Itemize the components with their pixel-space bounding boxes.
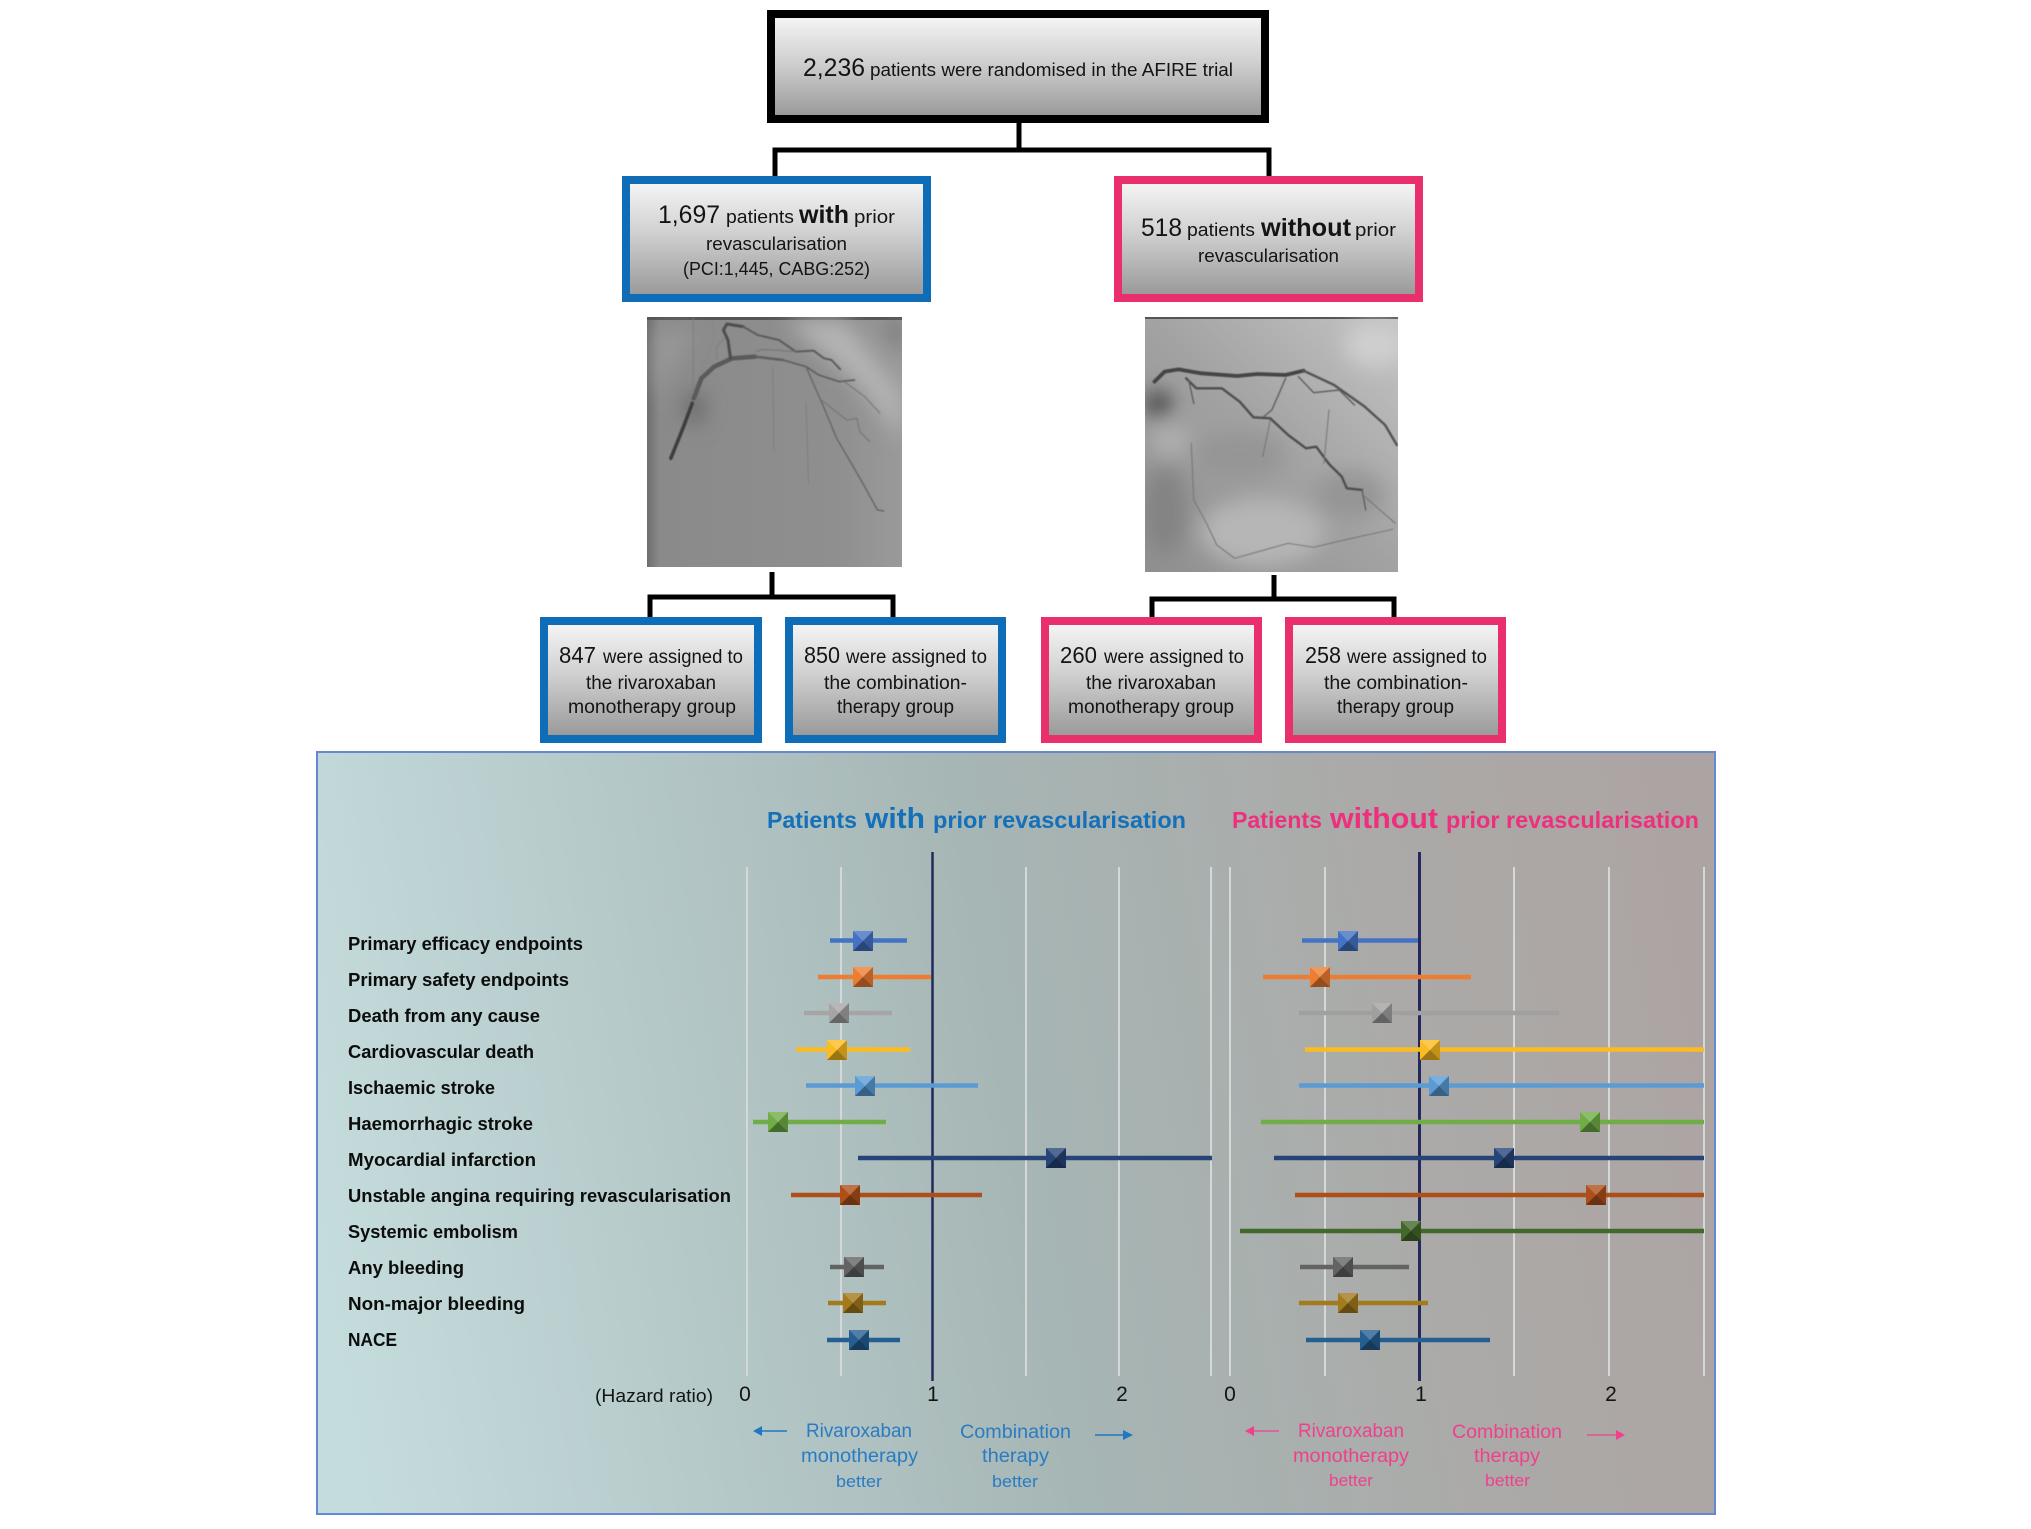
box: 850 combination therapy: the combination- [824,673,967,694]
box: 847 rivaroxaban monotherapy: monotherapy group [568,697,736,718]
flow connector: with-revascularisation arm to treatment groups [650,572,893,619]
box: 847 rivaroxaban monotherapy: were assigned to [602,647,743,668]
legend: with prior revascularisation: Rivaroxaban [806,1421,912,1442]
box: patients without prior revascularisation: 518 [1141,214,1182,242]
row: unstable angina [791,1185,982,1205]
row: non-major bleeding [1299,1293,1428,1313]
legend: without prior revascularisation: Rivaroxaban [1298,1421,1404,1442]
endpoint labels [348,934,731,1350]
row: unstable angina [1295,1185,1704,1205]
endpoint labels: Systemic embolism [348,1222,518,1242]
box: 260 rivaroxaban monotherapy: the rivaroxaban [1086,673,1216,694]
row: haemorrhagic stroke [1261,1112,1704,1132]
heading: patients with prior revascularisation: prior revascularisation [933,807,1186,833]
row: cardiovascular death [1305,1040,1704,1060]
arrow: combination better [1587,1430,1625,1440]
row: primary safety endpoints [818,967,931,987]
box: 850 combination therapy [789,621,1002,739]
box: 258 combination therapy: the combination- [1324,673,1468,694]
box: patients without prior revascularisation: without [1260,214,1352,242]
box: patients without prior revascularisation: prior [1355,220,1396,240]
row: NACE [1306,1330,1490,1350]
box: 260 rivaroxaban monotherapy: 260 [1060,642,1097,668]
row: haemorrhagic stroke [753,1112,886,1132]
image: coronary angiogram, without prior revascularisation [1143,317,1405,572]
row: myocardial infarction [858,1148,1212,1168]
legend: without prior revascularisation: Combination [1452,1422,1562,1443]
row: NACE [827,1330,900,1350]
heading: patients with prior revascularisation: with [864,803,925,835]
box: 258 combination therapy: therapy group [1337,697,1454,718]
box: randomised patients [771,14,1265,119]
row: systemic embolism [1240,1221,1704,1241]
flow connector: top box to arms [775,123,1269,180]
heading: patients without prior revascularisation: Patients [1232,807,1322,833]
endpoint labels: Cardiovascular death [348,1042,534,1062]
endpoint labels: Death from any cause [348,1006,540,1026]
row: cardiovascular death [796,1040,910,1060]
box: 258 combination therapy [1289,621,1502,739]
image: coronary angiogram, with prior revascularisation [647,317,902,567]
box: randomised patients: 2,236 [803,54,865,82]
box: 258 combination therapy: 258 [1305,642,1341,668]
box: 258 combination therapy: were assigned to [1346,647,1487,668]
legend: without prior revascularisation: better [1329,1471,1373,1490]
arrow: combination better [1095,1430,1133,1440]
row: any bleeding [830,1257,884,1277]
legend: with prior revascularisation: better [992,1472,1038,1491]
box: patients with prior revascularisation: (PCI:1,445, CABG:252) [683,259,870,279]
axis labels: hazard ratio: 1 [1415,1383,1427,1406]
endpoint labels: Primary safety endpoints [348,970,569,990]
row: death from any cause [804,1003,892,1023]
endpoint labels: NACE [348,1330,397,1350]
box: patients without prior revascularisation: revascularisation [1198,246,1339,266]
box: patients with prior revascularisation: revascularisation [706,234,847,254]
box: patients with prior revascularisation: prior [854,207,895,227]
row: myocardial infarction [1274,1148,1704,1168]
box: patients with prior revascularisation: 1,697 [658,201,720,229]
legend: without prior revascularisation [1245,1421,1625,1490]
legend: with prior revascularisation [753,1421,1133,1491]
axis labels: hazard ratio: 0 [1224,1383,1236,1406]
box: 260 rivaroxaban monotherapy [1045,621,1258,739]
box: 850 combination therapy: therapy group [837,697,954,718]
heading: patients without prior revascularisation: prior revascularisation [1446,807,1699,833]
endpoint labels: Ischaemic stroke [348,1078,495,1098]
row: non-major bleeding [828,1293,886,1313]
box: 260 rivaroxaban monotherapy: monotherapy group [1068,697,1234,718]
forest plot: with prior revascularisation [747,852,1212,1381]
arrow: rivaroxaban better [753,1426,787,1436]
legend: without prior revascularisation: monotherapy [1293,1446,1410,1467]
legend: with prior revascularisation: therapy [982,1446,1050,1467]
endpoint labels: Myocardial infarction [348,1150,536,1170]
axis labels: hazard ratio: (Hazard ratio) [595,1386,713,1406]
heading: patients with prior revascularisation: Patients [767,807,857,833]
heading: patients with prior revascularisation [767,803,1186,835]
legend: with prior revascularisation: Combination [960,1422,1071,1443]
row: primary efficacy endpoints [830,931,907,951]
forest plot: without prior revascularisation [1230,852,1704,1381]
row: death from any cause [1299,1003,1559,1023]
box: randomised patients: patients were randomised in the AFIRE trial [870,60,1233,80]
axis labels: hazard ratio [595,1383,1617,1406]
row: ischaemic stroke [1299,1076,1704,1096]
box: patients with prior revascularisation: with [798,201,849,229]
heading: patients without prior revascularisation [1232,803,1699,835]
box: 850 combination therapy: were assigned to [845,647,987,668]
endpoint labels: Unstable angina requiring revascularisation [348,1186,731,1206]
box: patients with prior revascularisation: patients [726,207,794,227]
box: 847 rivaroxaban monotherapy: 847 [559,642,596,668]
endpoint labels: Haemorrhagic stroke [348,1114,533,1134]
axis labels: hazard ratio: 0 [739,1383,751,1406]
legend: with prior revascularisation: better [836,1472,882,1491]
row: ischaemic stroke [806,1076,978,1096]
box: patients without prior revascularisation [1118,180,1419,298]
legend: without prior revascularisation: better [1485,1471,1530,1490]
flow connector: without-revascularisation arm to treatment groups [1152,575,1394,621]
box: 850 combination therapy: 850 [804,642,840,668]
box: patients with prior revascularisation [626,180,927,298]
box: 847 rivaroxaban monotherapy [544,621,758,739]
row: any bleeding [1300,1257,1409,1277]
legend: without prior revascularisation: therapy [1474,1446,1541,1467]
axis labels: hazard ratio: 2 [1116,1383,1128,1406]
axis labels: hazard ratio: 2 [1605,1383,1617,1406]
axis labels: hazard ratio: 1 [927,1383,939,1406]
panel: forest plot background [317,752,1715,1514]
legend: with prior revascularisation: monotherapy [801,1446,919,1467]
endpoint labels: Any bleeding [348,1258,464,1278]
box: patients without prior revascularisation: patients [1187,220,1255,240]
endpoint labels: Non-major bleeding [348,1294,525,1314]
arrow: rivaroxaban better [1245,1426,1279,1436]
row: primary efficacy endpoints [1302,931,1418,951]
row: primary safety endpoints [1263,967,1471,987]
box: 260 rivaroxaban monotherapy: were assigned to [1103,647,1244,668]
endpoint labels: Primary efficacy endpoints [348,934,583,954]
heading: patients without prior revascularisation: without [1329,803,1438,835]
box: 847 rivaroxaban monotherapy: the rivaroxaban [586,673,716,694]
